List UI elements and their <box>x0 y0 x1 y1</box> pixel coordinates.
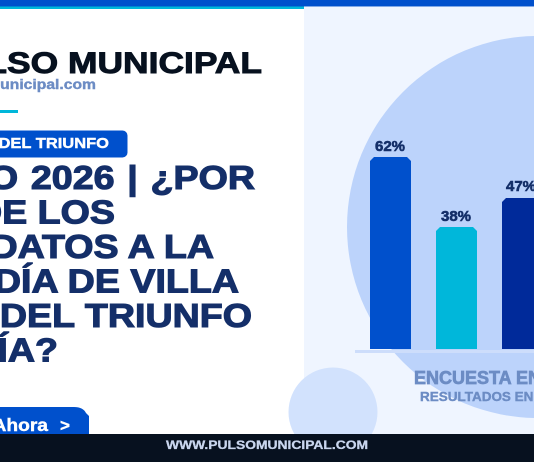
bar chart <box>370 138 534 349</box>
top bar <box>0 0 534 9</box>
footer bar: WWW.PULSOMUNICIPAL.COM <box>166 438 368 452</box>
decorative small circle <box>288 368 378 456</box>
bar: 62% <box>370 138 411 349</box>
footer bar <box>0 434 534 462</box>
panel: right chart background <box>304 7 534 434</box>
bar: 62%: 62% <box>375 138 405 155</box>
call to action button: > <box>60 416 70 435</box>
chart baseline <box>355 350 534 353</box>
bar: 38%: 38% <box>441 208 471 225</box>
accent line <box>0 110 18 113</box>
decorative large circle <box>347 36 534 418</box>
category pill <box>0 130 128 158</box>
chart caption <box>414 367 534 404</box>
bar: 47% <box>502 178 534 349</box>
call to action button <box>0 407 89 440</box>
headline <box>0 160 255 369</box>
bar: 38% <box>436 208 477 349</box>
